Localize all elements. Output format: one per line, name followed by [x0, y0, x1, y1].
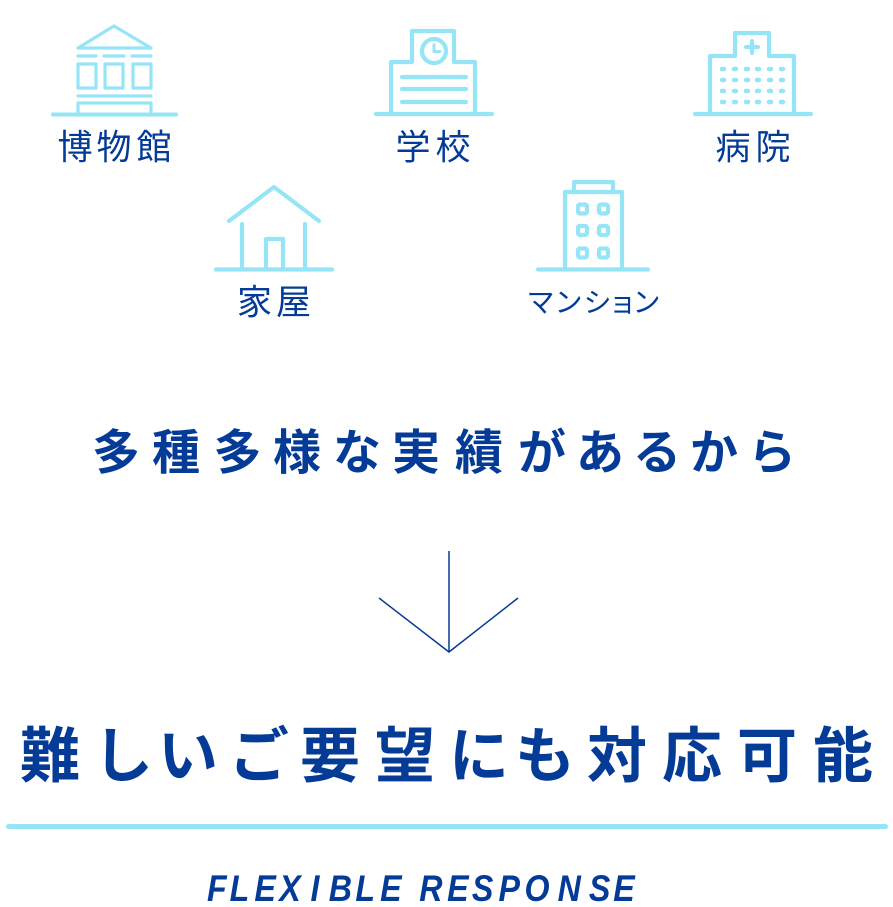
- main heading: any request: 難しいご要望にも対応可能: [20, 723, 873, 790]
- label: house: 家屋: [237, 284, 311, 322]
- icon: apartment: [538, 182, 648, 270]
- heading: diverse track record: 多種多様な実績があるから: [92, 427, 796, 480]
- icon: museum: [53, 26, 176, 114]
- label: hospital: 病院: [716, 128, 791, 168]
- arrow: down: [379, 551, 518, 652]
- icon: house: [216, 187, 332, 270]
- icon: school: [376, 31, 492, 114]
- label: apartment: マンション: [526, 287, 661, 318]
- icon: hospital: [695, 33, 811, 114]
- label: school: 学校: [396, 128, 471, 168]
- label: museum: 博物館: [58, 128, 172, 168]
- divider line: [6, 824, 888, 829]
